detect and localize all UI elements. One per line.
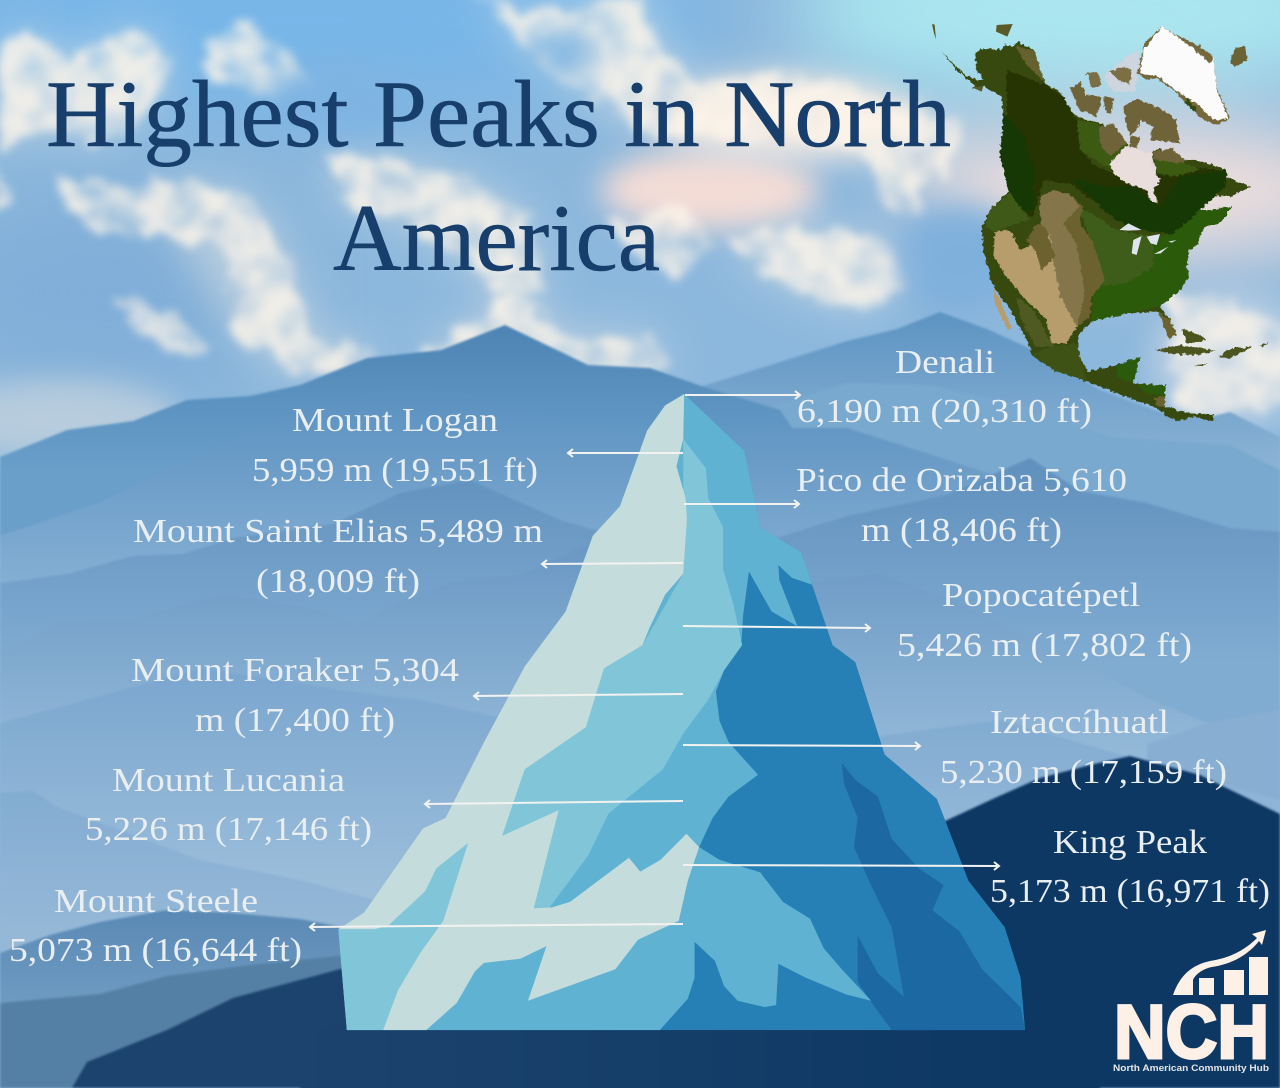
label: Mount Logan: Mount Logan — [292, 402, 498, 439]
title: Highest Peaks in North — [46, 61, 951, 167]
background: misty mountain layers — [0, 312, 1280, 1088]
label: King Peak: King Peak — [1053, 824, 1207, 861]
arrow: Mount Lucania — [425, 800, 683, 808]
icon: map of North America — [932, 24, 1270, 422]
title: America — [333, 185, 660, 291]
logo icon: rising bars and arrow — [1173, 930, 1268, 995]
arrow: Mount Foraker — [474, 692, 683, 700]
map: caribbean islands — [1155, 328, 1270, 367]
title — [46, 61, 951, 291]
label: Mount Steele: Mount Steele — [54, 883, 258, 920]
map: iceland — [1230, 46, 1247, 67]
mountain: cyan lower left — [338, 843, 468, 1030]
mountain: cyan face — [502, 439, 742, 908]
map: land areas — [942, 42, 1250, 422]
label: Pico de Orizaba: Pico de Orizaba 5,610 — [796, 462, 1127, 499]
label: King Peak: 5,173 m (16,971 ft) — [990, 873, 1270, 910]
label: Mount Logan: 5,959 m (19,551 ft) — [252, 452, 538, 489]
label: Pico de Orizaba — [796, 462, 1127, 549]
mountain: light blue face — [338, 394, 871, 1030]
label: Mount Logan — [252, 402, 538, 489]
mountain: pale snow face — [338, 394, 699, 1030]
map: greenland — [1137, 27, 1230, 125]
arrow: Mount Logan — [568, 449, 683, 457]
label: Mount Saint Elias — [133, 513, 543, 600]
map: arctic islands and ice — [1070, 50, 1185, 163]
map: aleutian and alaskan isles — [932, 24, 1013, 92]
mountain: base silhouette — [338, 394, 1025, 1030]
label: Mount Foraker: m (17,400 ft) — [195, 702, 395, 739]
logo wordmark: NCH — [1114, 990, 1269, 1075]
label: Mount Lucania — [85, 762, 372, 848]
map: great lakes — [1119, 223, 1177, 255]
logo: North American Community Hub — [1113, 930, 1269, 1075]
label: Mount Lucania: Mount Lucania — [112, 762, 345, 799]
arrow: Mount Steele — [310, 923, 683, 931]
logo caption: North American Community Hub — [1113, 1063, 1269, 1074]
arrow: Mount Saint Elias — [542, 560, 683, 568]
label: Mount Steele: 5,073 m (16,644 ft) — [9, 932, 302, 969]
label: Popocatepetl: Popocatépetl — [942, 577, 1140, 614]
label: Mount Saint Elias: (18,009 ft) — [256, 563, 420, 600]
label: Mount Steele — [9, 883, 302, 969]
label: Denali: 6,190 m (20,310 ft) — [797, 393, 1092, 430]
arrow: Iztaccihuatl — [683, 742, 920, 750]
label: Popocatepetl — [897, 577, 1192, 664]
arrow: Pico de Orizaba — [684, 500, 799, 508]
arrow: Popocatepetl — [683, 624, 870, 632]
arrow: Denali — [685, 391, 800, 399]
mountain illustration — [338, 394, 1025, 1030]
label: Mount Lucania: 5,226 m (17,146 ft) — [85, 811, 372, 848]
label: King Peak — [990, 824, 1270, 910]
label: Mount Saint Elias: Mount Saint Elias 5,489 m — [133, 513, 543, 550]
label: Denali: Denali — [895, 344, 995, 381]
label: Denali — [797, 344, 1092, 430]
map: hudson bay — [1110, 147, 1160, 203]
arrow: King Peak — [683, 862, 999, 870]
label: Mount Foraker: Mount Foraker 5,304 — [131, 652, 459, 689]
label: Iztaccihuatl: 5,230 m (17,159 ft) — [940, 754, 1227, 791]
label: Mount Foraker — [131, 652, 459, 739]
mountain: darkest shaded face — [842, 763, 1025, 1030]
label: Popocatepetl: 5,426 m (17,802 ft) — [897, 627, 1192, 664]
label: Iztaccihuatl: Iztaccíhuatl — [990, 704, 1169, 741]
label: Pico de Orizaba: m (18,406 ft) — [861, 512, 1062, 549]
label: Iztaccihuatl — [940, 704, 1227, 791]
